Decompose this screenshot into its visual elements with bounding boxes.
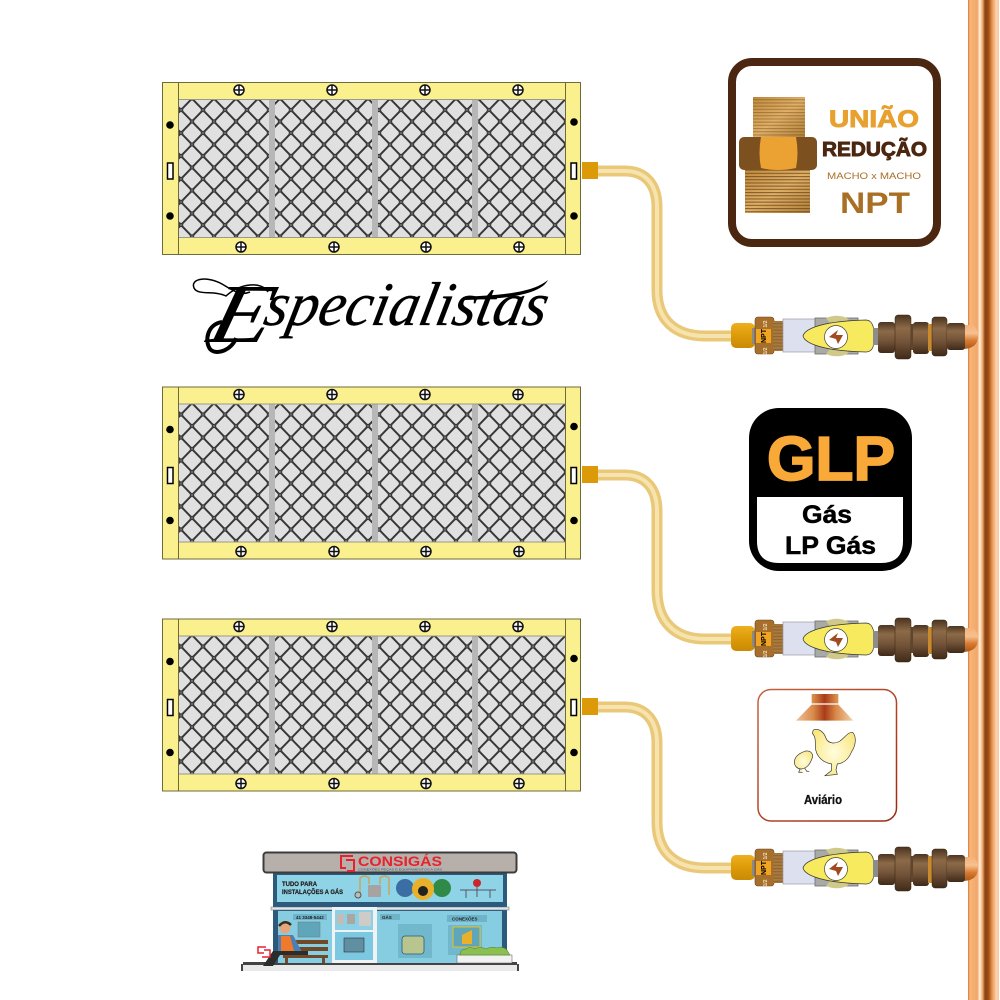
script heading: Especialistas: E — [199, 268, 285, 361]
valve assembly 3: NPT — [761, 860, 768, 875]
badge: União Redução Macho x Macho NPT: UNIÃO — [829, 105, 919, 133]
building — [273, 873, 507, 963]
right window — [377, 911, 502, 963]
badge: GLP Gás LP Gás: Gás — [802, 501, 852, 529]
badge: GLP Gás LP Gás: GLP — [767, 425, 895, 494]
roof sign: CONSIGÁS — [358, 854, 442, 869]
copper gas main pipe — [968, 0, 999, 1000]
valve assembly 2: NPT — [761, 631, 768, 646]
icon: hen — [812, 729, 855, 776]
left window: 41 3348-5442 — [296, 915, 324, 920]
badge: União Redução Macho x Macho NPT: NPT — [840, 187, 910, 220]
panel: infrared burner 3 — [162, 619, 580, 791]
badge: GLP Gás LP Gás — [749, 408, 912, 571]
hose 2 — [582, 466, 732, 639]
door — [332, 907, 377, 963]
valve assembly 1: 1/2 — [763, 347, 769, 354]
icon: copper heater hood — [796, 694, 853, 721]
valve assembly 2: 1/2 — [763, 650, 769, 657]
icon: brass reducing nipple — [739, 97, 817, 213]
badge: Aviário: Aviário — [804, 793, 842, 807]
script heading: Especialistas — [193, 268, 556, 361]
hose 3 — [582, 698, 732, 868]
banner — [277, 875, 503, 902]
roof sign: CONEXÕES PEÇAS E EQUIPAMENTOS A GÁS — [358, 866, 442, 872]
right window: CONEXÕES — [452, 916, 478, 922]
valve assembly 3 — [731, 847, 978, 891]
sidewalk — [241, 962, 519, 971]
badge: União Redução Macho x Macho NPT — [732, 62, 937, 243]
badge: União Redução Macho x Macho NPT: MACHO x MACHO — [827, 171, 921, 181]
small logo — [258, 947, 270, 957]
roof sign — [264, 852, 516, 872]
valve assembly 1: 1/2 — [763, 320, 769, 327]
valve assembly 2 — [731, 618, 978, 662]
badge: União Redução Macho x Macho NPT: REDUÇÃO — [822, 138, 927, 161]
planter — [457, 947, 512, 963]
valve assembly 2: 1/2 — [763, 623, 769, 630]
hose 1 — [582, 162, 732, 336]
icon: chick — [794, 751, 813, 772]
right window: GÁS — [382, 914, 392, 920]
banner: TUDO PARA — [282, 881, 317, 888]
valve assembly 1: NPT — [761, 328, 768, 343]
awning rail — [271, 907, 509, 910]
person seated — [263, 922, 308, 966]
valve assembly 1 — [731, 315, 978, 359]
illustration: Consigás storefront — [241, 852, 519, 971]
bench — [283, 940, 328, 963]
banner: INSTALAÇÕES A GÁS — [282, 887, 344, 896]
panel: infrared burner 2 — [162, 387, 580, 559]
left window — [278, 911, 332, 963]
panel: infrared burner 1 — [162, 82, 580, 254]
script heading: Especialistas: specialistas — [259, 270, 556, 339]
badge: Aviário — [758, 690, 896, 821]
valve assembly 3: 1/2 — [763, 852, 769, 859]
badge: GLP Gás LP Gás: LP Gás — [785, 532, 876, 560]
valve assembly 3: 1/2 — [763, 879, 769, 886]
